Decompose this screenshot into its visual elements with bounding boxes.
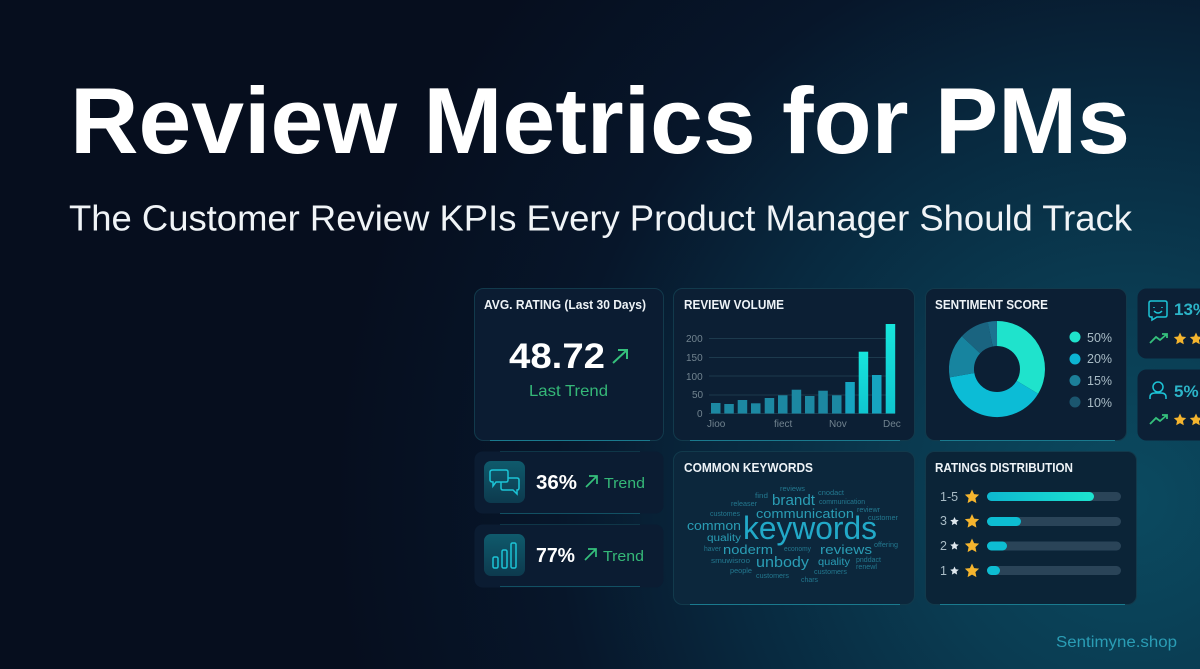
word cloud: communication: [819, 499, 865, 506]
legend: 20%: [1087, 352, 1112, 366]
word cloud: offering: [874, 542, 898, 549]
word cloud: [687, 486, 899, 584]
word cloud: customes: [710, 511, 740, 518]
bar chart: 50: [692, 390, 704, 401]
row: 1 star: 1: [940, 564, 947, 578]
bar chart: 0: [697, 409, 703, 420]
donut chart: [961, 334, 1032, 405]
bar chart: 200: [686, 334, 703, 345]
word cloud: keywords: [743, 510, 877, 546]
word cloud: cnodact: [818, 490, 844, 497]
heading: common keywords: COMMON KEYWORDS: [684, 461, 813, 475]
icon: bar chart: [484, 534, 525, 576]
bar chart: 150: [686, 353, 703, 364]
title: Review Metrics for PMs: [70, 68, 1130, 173]
word cloud: brandt: [772, 492, 816, 509]
panel: 36% trend row: [474, 452, 664, 514]
word cloud: communication: [756, 506, 854, 521]
word cloud: chars: [801, 577, 818, 584]
row: 2 star: [940, 538, 1121, 553]
panel: ratings distribution: [926, 452, 1136, 604]
trend label: Trend: [603, 548, 644, 565]
icon: trend arrow: [585, 549, 596, 560]
panel: sentiment score: [926, 288, 1126, 440]
word cloud: pnddact: [856, 557, 881, 564]
panel: smile metric: [1138, 288, 1200, 358]
word cloud: quality: [707, 533, 741, 544]
legend: 50%: [1087, 331, 1112, 345]
word cloud: people: [730, 568, 752, 575]
stars: [1174, 414, 1200, 425]
icon: trend arrow: [586, 476, 597, 487]
word cloud: haver: [704, 546, 722, 553]
rating value: 48.72: [509, 337, 605, 376]
word cloud: find: [755, 493, 768, 500]
heading: review volume: REVIEW VOLUME: [684, 298, 784, 312]
bar chart: fiect: [774, 419, 793, 430]
panel: common keywords: [674, 452, 914, 604]
trend label: Trend: [604, 475, 645, 492]
heading: average rating: AVG. RATING (Last 30 Days): [484, 298, 646, 312]
word cloud: customer: [868, 515, 899, 522]
legend: 10%: [1087, 396, 1112, 410]
row: 3 star: 3: [940, 514, 947, 528]
subtitle: The Customer Review KPIs Every Product Manager Should Track: [69, 198, 1133, 238]
value: 36%: 36%: [536, 472, 577, 494]
row: 1 star: [940, 564, 1121, 578]
legend: 15%: [1087, 374, 1112, 388]
icon: trend line: [1150, 334, 1167, 343]
row: 1-5: 1-5: [940, 490, 958, 504]
icon: trend arrow: [613, 350, 627, 363]
panel: person metric: [1138, 370, 1200, 440]
icon: chat bubbles: [484, 461, 525, 503]
word cloud: renewl: [856, 564, 877, 571]
word cloud: economy: [784, 546, 811, 553]
row: 1-5: [940, 490, 1121, 504]
word cloud: reviews: [780, 486, 806, 493]
word cloud: releaser: [731, 501, 758, 508]
word cloud: reviews: [820, 542, 873, 557]
heading: ratings distribution: RATINGS DISTRIBUTION: [935, 461, 1073, 475]
word cloud: common: [687, 518, 741, 533]
panel: average rating: [474, 288, 664, 440]
heading: sentiment score: SENTIMENT SCORE: [935, 298, 1048, 312]
word cloud: smuwisroo: [711, 558, 750, 565]
word cloud: customers: [814, 569, 847, 576]
word cloud: noderm: [723, 542, 773, 557]
word cloud: customers: [756, 573, 789, 580]
row: 2 star: 2: [940, 539, 947, 553]
brand label: Sentimyne.shop: [1056, 634, 1177, 651]
value: 77%: 77%: [536, 545, 575, 567]
icon: person: [1150, 382, 1166, 399]
icon: smiley speech bubble: [1149, 301, 1167, 320]
word cloud: reviewr: [857, 507, 881, 514]
trend label: Last Trend: [529, 383, 608, 400]
bar chart: [686, 324, 901, 430]
bar chart: Nov: [829, 419, 847, 430]
panel: 77% trend row: [474, 524, 664, 588]
panel: review volume: [674, 288, 914, 440]
bar chart: 100: [686, 372, 703, 383]
row: 3 star: [940, 514, 1121, 528]
bar chart: Jioo: [707, 419, 726, 430]
bar chart: Dec: [883, 419, 901, 430]
legend: [1070, 331, 1112, 410]
word cloud: unbody: [756, 554, 810, 571]
icon: trend line: [1150, 415, 1167, 424]
word cloud: quality: [818, 557, 850, 568]
value: 5%: 5%: [1174, 382, 1199, 401]
stars: [1174, 332, 1200, 344]
